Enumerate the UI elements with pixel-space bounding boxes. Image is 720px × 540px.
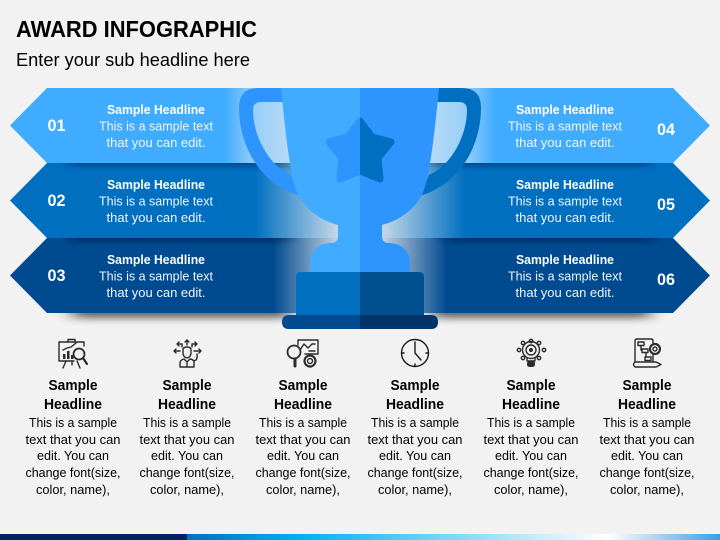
column 2 text: text that you can [140, 432, 234, 447]
label 06: This is a sample text [508, 270, 623, 284]
column 1 text: edit. You can [37, 448, 109, 463]
arrow band 06 [380, 238, 710, 313]
trophy [239, 88, 481, 329]
arrow band 01 [10, 88, 300, 163]
column 2 text: Sample [162, 378, 212, 394]
icon: blueprint with gear and pencil [634, 339, 661, 367]
label 01 [48, 103, 214, 150]
column 5 text: Headline [502, 397, 560, 413]
column 1 text: color, name), [36, 482, 110, 497]
label 04 [508, 103, 676, 150]
label 02: that you can edit. [106, 211, 206, 225]
icon: presentation board with magnifier [59, 340, 87, 368]
column 5 text: This is a sample [487, 415, 575, 430]
arrow band 04 [430, 88, 710, 163]
arrow band 02 [10, 163, 340, 238]
label 01: Sample Headline [107, 103, 205, 117]
trophy handle: left [239, 88, 300, 196]
label 03 [48, 253, 214, 300]
column 5 text: color, name), [494, 482, 568, 497]
column 5 text: Sample [506, 378, 556, 394]
label 04: that you can edit. [516, 136, 614, 150]
label 05: 05 [657, 196, 675, 214]
column 2 text: color, name), [150, 482, 224, 497]
label 01: This is a sample text [99, 120, 214, 134]
column 6 text: change font(size, [600, 465, 694, 480]
column 6 text: text that you can [600, 432, 694, 447]
column 4 text: change font(size, [368, 465, 462, 480]
label 03: This is a sample text [99, 270, 214, 284]
column 2 text: Headline [158, 397, 216, 413]
trophy handle: right [420, 88, 481, 196]
trophy star: right half [360, 118, 394, 182]
column 1 text: This is a sample [29, 415, 117, 430]
column 5 text: edit. You can [495, 448, 567, 463]
column 6 text [600, 378, 694, 497]
label 02 [48, 178, 214, 225]
icon: clock [402, 340, 428, 366]
trophy base: right half [360, 272, 424, 315]
label 01: that you can edit. [106, 136, 206, 150]
band shadow: right 05 [430, 163, 656, 169]
label 04: This is a sample text [508, 120, 623, 134]
column 4 text: Headline [386, 397, 444, 413]
column 4 text [368, 378, 462, 497]
label 05: This is a sample text [508, 194, 623, 208]
label 03: that you can edit. [106, 286, 206, 300]
floor shadow: left [72, 305, 290, 318]
band shadow: right 06 [440, 238, 660, 244]
column 3 text: text that you can [256, 432, 350, 447]
label 06: 06 [657, 271, 675, 289]
column 5 text [484, 378, 578, 497]
footer bar: gradient segment [187, 534, 720, 540]
footer bar: dark segment [0, 534, 187, 540]
column 6 text: Headline [618, 397, 676, 413]
column 3 text: Sample [278, 378, 328, 394]
trophy cup and stem: left half [281, 88, 360, 272]
column 3 text [256, 378, 350, 497]
label 05: that you can edit. [516, 211, 614, 225]
trophy star: left half [326, 118, 360, 182]
label 06 [508, 253, 675, 300]
trophy plinth: right half [360, 315, 438, 329]
icon: person with arrows [174, 340, 201, 367]
title: AWARD INFOGRAPHIC [16, 16, 257, 42]
label 01: 01 [48, 117, 66, 135]
column 1 text: change font(size, [26, 465, 120, 480]
label 05: Sample Headline [516, 178, 614, 192]
column 5 text: change font(size, [484, 465, 578, 480]
column 3 text: This is a sample [259, 415, 347, 430]
band shadow: left 02 [62, 163, 290, 169]
label 03: Sample Headline [107, 253, 205, 267]
column 3 text: change font(size, [256, 465, 350, 480]
band shadow: left 03 [62, 238, 297, 244]
column 6 text: Sample [622, 378, 672, 394]
subtitle: Enter your sub headline here [16, 49, 250, 70]
label 02: Sample Headline [107, 178, 205, 192]
column 4 text: text that you can [368, 432, 462, 447]
floor shadow: right [432, 305, 650, 318]
column 2 text: edit. You can [151, 448, 223, 463]
arrow band 03 [10, 238, 340, 313]
column 2 text: change font(size, [140, 465, 234, 480]
label 06: Sample Headline [516, 253, 614, 267]
column 2 text [140, 378, 234, 497]
trophy base: left half [296, 272, 360, 315]
label 06: that you can edit. [516, 286, 614, 300]
label 02: This is a sample text [99, 194, 214, 208]
column 4 text: Sample [390, 378, 440, 394]
column 6 text: This is a sample [603, 415, 691, 430]
arrow band 05 [380, 163, 710, 238]
column 1 text: text that you can [26, 432, 120, 447]
label 04: Sample Headline [516, 103, 614, 117]
trophy plinth: left half [282, 315, 360, 329]
column 1 text: Sample [48, 378, 98, 394]
icon: light bulb with target [517, 339, 546, 367]
label 02: 02 [48, 192, 66, 210]
column 1 text: Headline [44, 397, 102, 413]
label 05 [508, 178, 675, 225]
column 6 text: edit. You can [611, 448, 683, 463]
icon: magnifier, chart and gear [288, 340, 318, 366]
column 4 text: edit. You can [379, 448, 451, 463]
column 3 text: color, name), [266, 482, 340, 497]
column 3 text: edit. You can [267, 448, 339, 463]
trophy cup and stem: right half [360, 88, 439, 272]
column 6 text: color, name), [610, 482, 684, 497]
column 4 text: color, name), [378, 482, 452, 497]
column 3 text: Headline [274, 397, 332, 413]
column 4 text: This is a sample [371, 415, 459, 430]
label 03: 03 [48, 267, 66, 285]
column 1 text [26, 378, 120, 497]
label 04: 04 [657, 121, 676, 139]
column 2 text: This is a sample [143, 415, 231, 430]
column 5 text: text that you can [484, 432, 578, 447]
